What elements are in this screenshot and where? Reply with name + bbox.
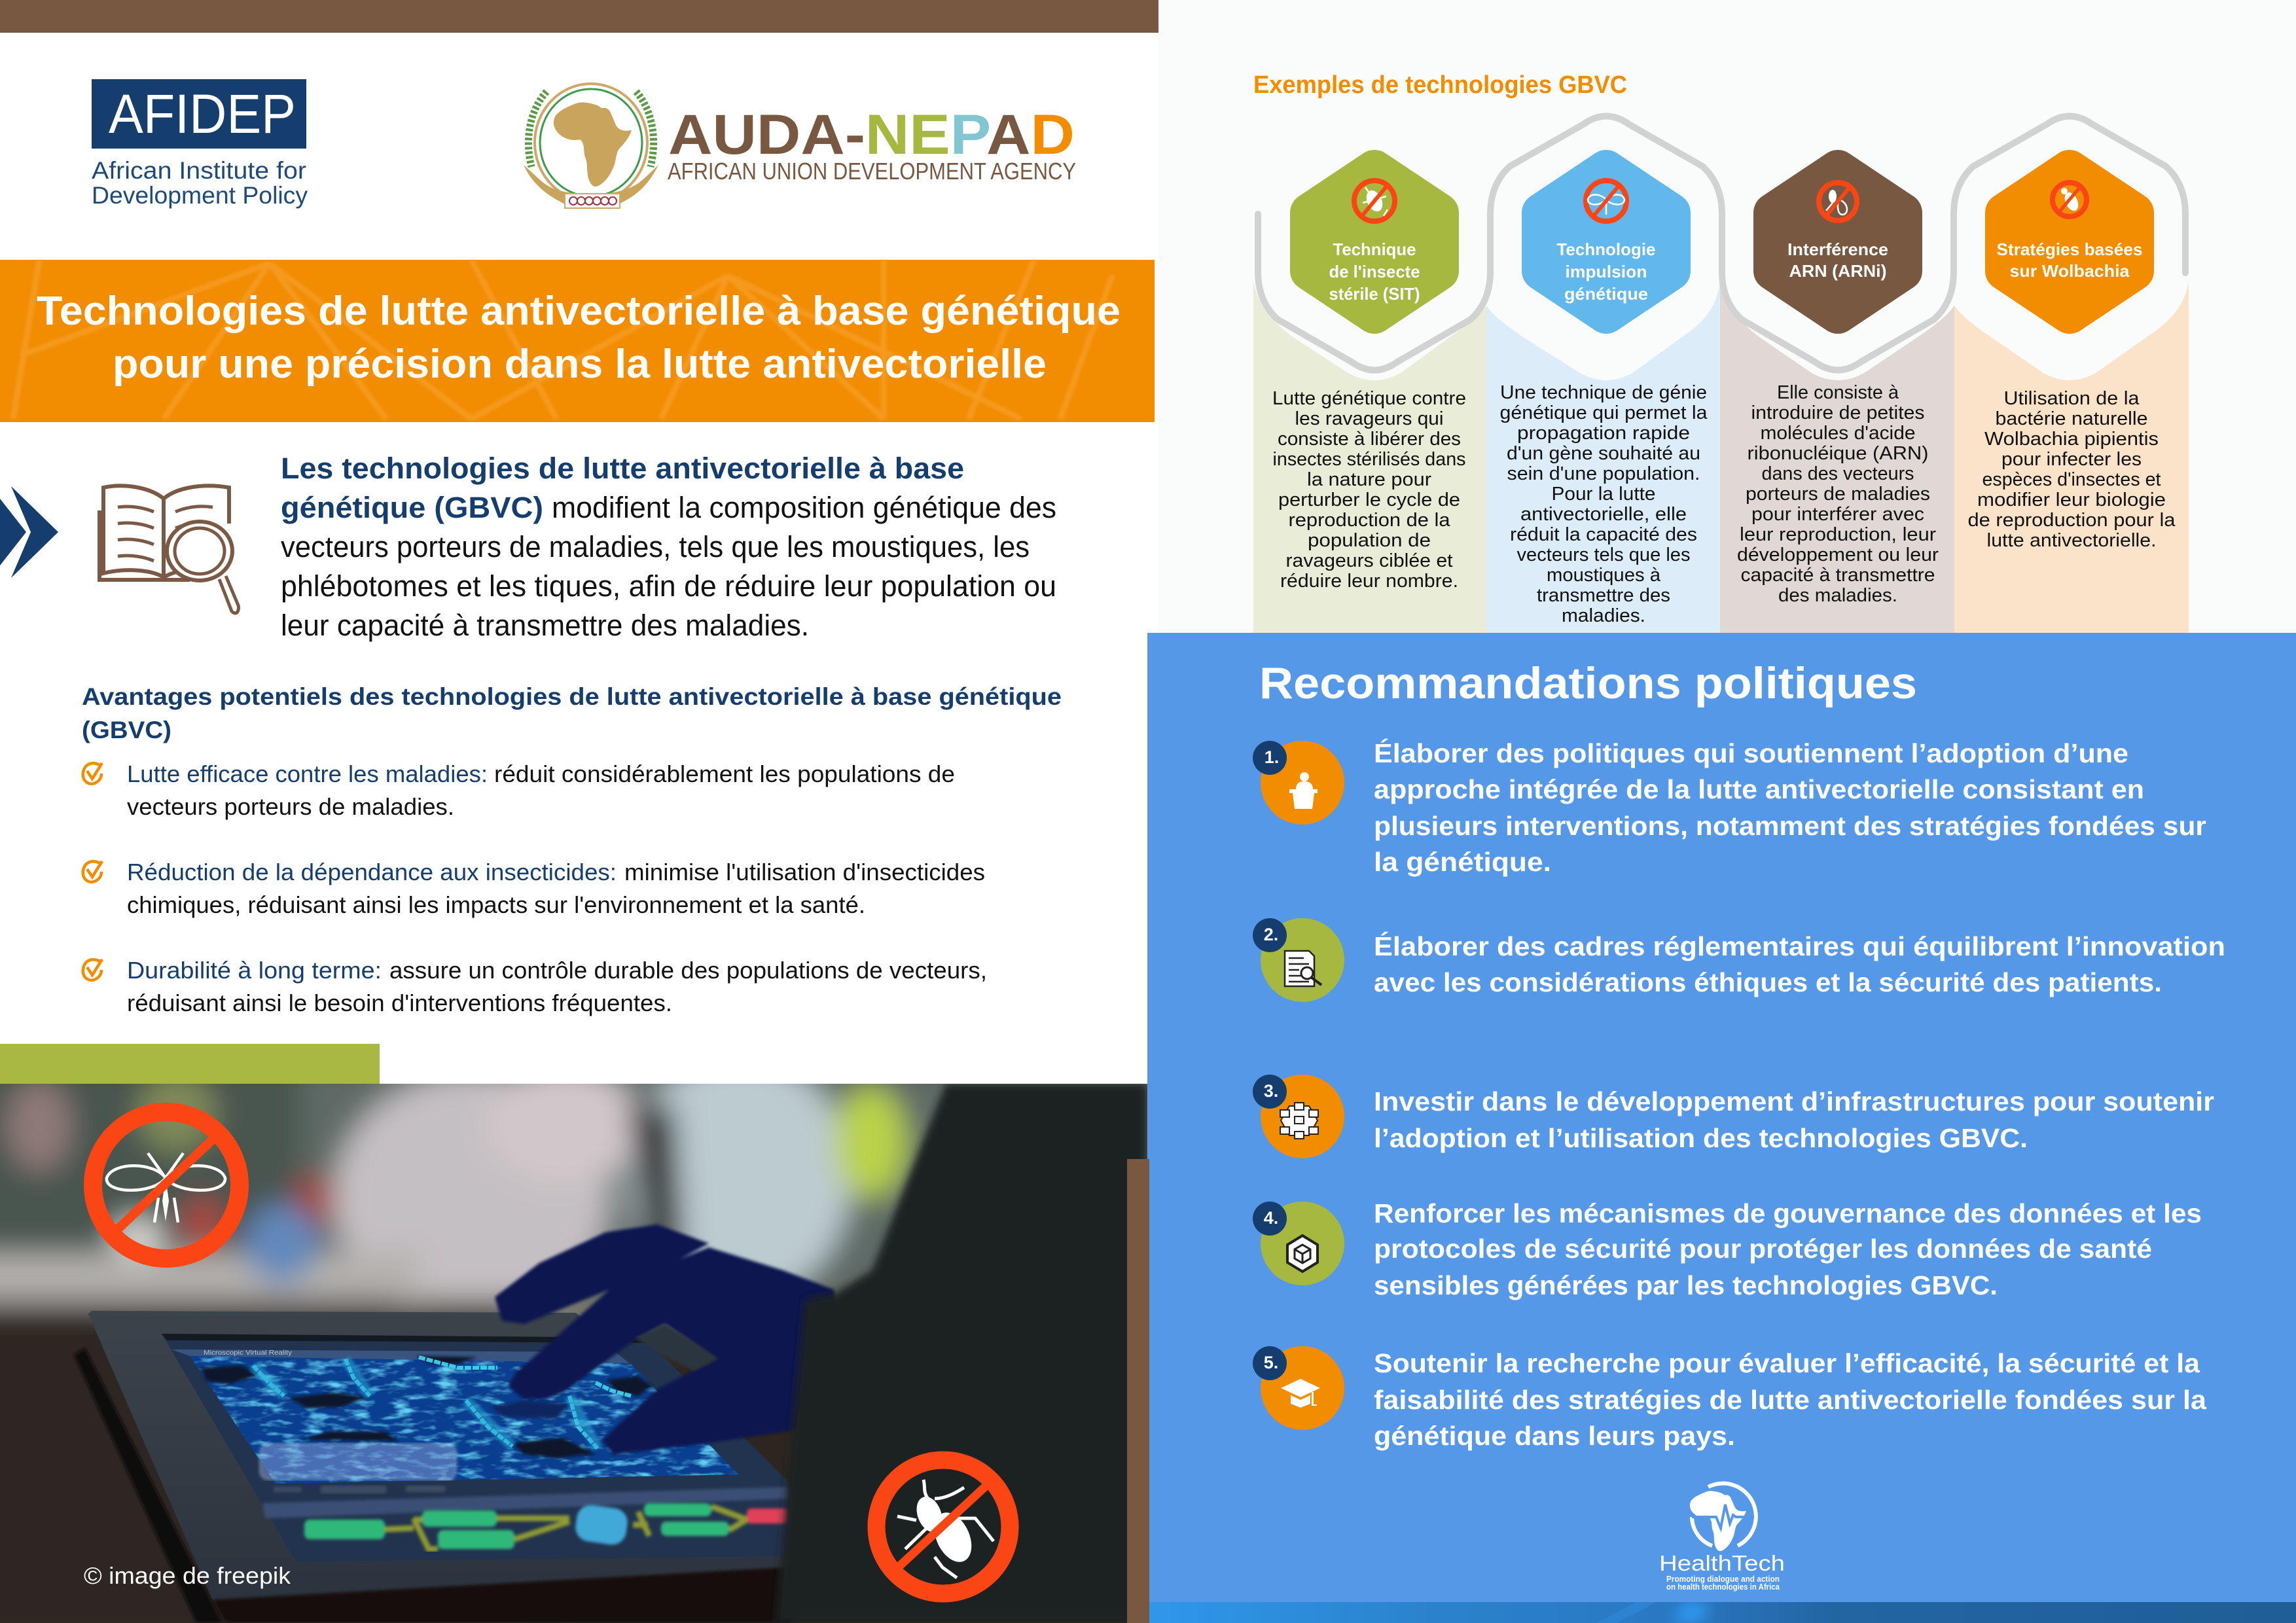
icon: African Union emblem (524, 84, 658, 208)
icon: check (83, 763, 102, 784)
logo: AUDA-NEPAD (524, 84, 1076, 208)
hexagon: RNAi: Interférence (1787, 240, 1888, 259)
text: SIT description: réduire leur nombre. (1280, 571, 1458, 592)
text: SIT description: reproduction de la (1288, 510, 1450, 531)
heading: avantages (82, 683, 1062, 743)
recommendation 2: avec les considérations éthiques et la sécurité des patients. (1374, 967, 2162, 997)
hexagon: Wolbachia: sur Wolbachia (2009, 261, 2130, 281)
recommendation 4: 4. (1264, 1208, 1278, 1228)
benefit 3: réduisant ainsi le besoin d'interventions fréquentes. (127, 990, 672, 1016)
text: gene drive description: Une technique de génie (1500, 382, 1707, 403)
hexagon: gene drive: génétique (1564, 284, 1648, 304)
hexagon: RNAi (1773, 169, 1903, 314)
recommendation 5 (1253, 1346, 2207, 1451)
text: SIT description: la nature pour (1307, 469, 1431, 490)
text: SIT description: consiste à libérer des (1278, 429, 1461, 450)
column background: SIT (1253, 279, 1486, 633)
icon: crossed mosquito (1586, 181, 1626, 221)
recommendation 2: Élaborer des cadres réglementaires qui équilibrent l’innovation (1374, 931, 2225, 961)
logo: HealthTech: Promoting dialogue and action (1666, 1575, 1780, 1584)
benefit 2: minimise l'utilisation d'insecticides (624, 859, 985, 885)
connecting grey ring line (1258, 116, 2185, 370)
text: Wolbachia description: de reproduction pour la (1967, 510, 2176, 531)
column background: gene drive (1486, 279, 1720, 633)
recommendation 1: 1. (1265, 747, 1279, 767)
intro paragraph (281, 452, 1056, 642)
benefit 3: assure un contrôle durable des populations de vecteurs, (389, 957, 987, 984)
figure foreground (776, 1084, 1147, 1623)
hexagon: SIT (1310, 169, 1439, 314)
logo: AFIDEP (92, 79, 308, 209)
hexagon: SIT: Technique (1333, 240, 1416, 259)
text: RNAi description: leur reproduction, leur (1740, 524, 1936, 545)
heading: avantages: (GBVC) (82, 717, 171, 743)
heading: avantages: Avantages potentiels des technologies de lutte antivectorielle à base génétique (82, 683, 1062, 710)
text: gene drive description: moustiques à (1547, 565, 1661, 586)
icon: check (83, 861, 102, 882)
text: RNAi description: porteurs de maladies (1746, 484, 1930, 505)
recommendation 1: plusieurs interventions, notamment des stratégies fondées sur (1374, 811, 2206, 841)
recommendation 3: Investir dans le développement d’infrastructures pour soutenir (1374, 1086, 2214, 1116)
intro paragraph: leur capacité à transmettre des maladies. (281, 609, 809, 642)
recommendation 3: l’adoption et l’utilisation des technologies GBVC. (1374, 1123, 2028, 1153)
text: Wolbachia description: pour infecter les (2001, 449, 2142, 470)
icon: book and magnifier (99, 486, 239, 613)
recommendation 1: Élaborer des politiques qui soutiennent l’adoption d’une (1374, 738, 2128, 768)
text: RNAi description: pour interférer avec (1751, 504, 1924, 525)
photo: gloved hand on tablet (0, 1054, 1204, 1623)
hexagon: gene drive: impulsion (1566, 262, 1647, 281)
benefit 3 (83, 957, 987, 1016)
intro paragraph: phlébotomes et les tiques, afin de réduire leur population ou (281, 569, 1056, 603)
icon: document and magnifier (1285, 951, 1321, 986)
text: Wolbachia description: espèces d'insectes et (1982, 469, 2161, 490)
column background: RNAi (1720, 279, 1954, 633)
image credit: © image de freepik (84, 1562, 291, 1589)
recommendation 2 (1253, 918, 2225, 1002)
icon: network of cubes (1280, 1103, 1318, 1139)
hexagon: Wolbachia: Stratégies basées (1996, 240, 2143, 259)
glass overlay (260, 1444, 456, 1479)
text: gene drive description: réduit la capacité des (1510, 524, 1697, 545)
text: gene drive description: génétique qui permet la (1500, 402, 1708, 423)
text: gene drive description: maladies. (1562, 605, 1645, 626)
icon: check (83, 959, 102, 980)
text: Wolbachia description (1967, 388, 2176, 551)
text: SIT description: les ravageurs qui (1295, 408, 1444, 429)
text: SIT description: ravageurs ciblée et (1285, 550, 1453, 571)
text: RNAi description: développement ou leur (1737, 544, 1939, 565)
text: SIT description: Lutte génétique contre (1272, 388, 1466, 409)
title text: pour une précision dans la lutte antivectorielle (113, 342, 1047, 387)
hexagon: gene drive: Technologie (1556, 240, 1656, 259)
text: gene drive description: d'un gène souhaité au (1507, 443, 1700, 464)
recommendation 3 (1253, 1075, 2214, 1158)
text: gene drive description: vecteurs tels que les (1517, 544, 1690, 565)
text: gene drive description (1500, 382, 1708, 626)
benefit 1: réduit considérablement les populations de (494, 760, 955, 787)
logo: AUDA-NEPAD: AUDA- NEPAD (668, 103, 1075, 166)
tablet bezel seen through the hand (635, 1324, 718, 1371)
text: SIT description: population de (1308, 530, 1431, 551)
footer gradient strip (1147, 1602, 2296, 1623)
recommendation 1: approche intégrée de la lutte antivectorielle consistant en (1374, 774, 2144, 804)
text: Wolbachia description: lutte antivectorielle. (1987, 530, 2156, 551)
text: SIT description (1272, 388, 1466, 592)
hexagon: SIT: stérile (SIT) (1329, 284, 1420, 304)
recommendation 4: protocoles de sécurité pour protéger les données de santé (1374, 1234, 2152, 1264)
heading: exemples: Exemples de technologies GBVC (1253, 71, 1627, 99)
title text (37, 289, 1121, 387)
hexagon: gene drive (1541, 169, 1671, 314)
recommendation 2: 2. (1264, 925, 1278, 944)
recommendation 3: 3. (1264, 1081, 1278, 1101)
icon: hexagon with cube (1287, 1236, 1318, 1272)
hexagon: SIT: de l'insecte (1329, 262, 1420, 281)
text: RNAi description: dans des vecteurs (1762, 463, 1914, 484)
hexagon: RNAi: ARN (ARNi) (1789, 261, 1886, 281)
text: Wolbachia description: bactérie naturelle (1995, 408, 2148, 429)
logo: AFIDEP: Development Policy (92, 182, 308, 209)
recommendation 4 (1253, 1198, 2202, 1300)
text: gene drive description: Pour la lutte (1551, 484, 1656, 505)
logo: AUDA-NEPAD: AFRICAN UNION DEVELOPMENT AGENCY (668, 158, 1076, 185)
recommendation 5: génétique dans leurs pays. (1374, 1421, 1735, 1451)
text: gene drive description: propagation rapide (1517, 423, 1690, 444)
benefit 1 (83, 760, 955, 820)
intro paragraph: Les technologies de lutte antivectorielle à base (281, 452, 964, 485)
hexagon: Wolbachia (1996, 169, 2143, 314)
logo: HealthTech (1659, 1484, 1785, 1592)
title text: Technologies de lutte antivectorielle à base génétique (37, 289, 1121, 334)
icon: crossed bug (876, 1460, 1010, 1594)
top brown bar (0, 0, 1158, 33)
UI strip (262, 1487, 789, 1518)
text: RNAi description: Elle consiste à (1777, 382, 1899, 403)
recommendation 5: Soutenir la recherche pour évaluer l’efficacité, la sécurité et la (1374, 1348, 2200, 1378)
benefit 1: vecteurs porteurs de maladies. (127, 793, 454, 820)
recommendation 5: 5. (1264, 1353, 1278, 1372)
tablet (74, 1311, 797, 1623)
recommendation 1 (1253, 738, 2206, 877)
tablet: Microscopic Virtual Reality (204, 1349, 292, 1357)
text: SIT description: insectes stérilisés dans (1272, 449, 1466, 470)
text: gene drive description: antivectorielle, elle (1520, 504, 1687, 525)
green accent bar (0, 1044, 380, 1084)
recommendation 5: faisabilité des stratégies de lutte antivectorielle fondées sur la (1374, 1385, 2207, 1415)
text: Wolbachia description: Wolbachia pipientis (1984, 429, 2159, 450)
icon: crossed bug (2053, 183, 2087, 217)
text: RNAi description: molécules d'acide (1761, 423, 1915, 444)
benefit 2: chimiques, réduisant ainsi les impacts sur l'environnement et la santé. (127, 891, 865, 918)
recommendation 1: la génétique. (1374, 847, 1551, 877)
icon: crossed fly (1819, 183, 1857, 221)
benefit 2 (83, 859, 985, 918)
benefit 1: Lutte efficace contre les maladies: (127, 760, 488, 787)
blue recommendations panel background (1147, 633, 2296, 1623)
glove (495, 1224, 834, 1455)
icon: double chevron (0, 486, 58, 578)
text: Wolbachia description: modifier leur biologie (1977, 490, 2166, 510)
heading: recommandations: Recommandations politiques (1259, 658, 1917, 708)
brown side strip (1127, 1159, 1149, 1623)
logo: AFIDEP: African Institute for (92, 157, 306, 184)
column background: Wolbachia (1954, 279, 2189, 633)
text: RNAi description: capacité à transmettre (1741, 565, 1935, 586)
title banner (0, 260, 1155, 422)
intro paragraph: génétique (GBVC) (281, 491, 543, 524)
text: gene drive description: sein d'une population. (1507, 463, 1700, 484)
text: RNAi description: des maladies. (1778, 585, 1897, 606)
text: Wolbachia description: Utilisation de la (2004, 388, 2140, 409)
icon: podium speaker (1289, 772, 1318, 809)
text: RNAi description: introduire de petites (1751, 402, 1924, 423)
text: RNAi description: ribonucléique (ARN) (1748, 443, 1928, 464)
text: gene drive description: transmettre des (1537, 585, 1670, 606)
icon: graduation cap (1281, 1379, 1320, 1408)
panel: examples of GBVC technologies (1253, 116, 2189, 633)
logo: HealthTech: on health technologies in Africa (1666, 1582, 1780, 1592)
intro paragraph: vecteurs porteurs de maladies, tels que les moustiques, les (281, 530, 1030, 563)
intro paragraph: modifient la composition génétique des (552, 491, 1056, 524)
logo: AFIDEP: AFIDEP (109, 83, 296, 145)
logo: HealthTech: HealthTech (1659, 1551, 1785, 1575)
recommendation 4: sensibles générées par les technologies GBVC. (1374, 1270, 1998, 1300)
benefit 2: Réduction de la dépendance aux insecticides: (127, 859, 617, 885)
icon: crossed tick (1354, 181, 1395, 221)
text: SIT description: perturber le cycle de (1278, 490, 1460, 510)
text: RNAi description (1737, 382, 1939, 606)
recommendation 4: Renforcer les mécanismes de gouvernance des données et les (1374, 1198, 2202, 1228)
icon: crossed mosquito (93, 1112, 240, 1258)
benefit 3: Durabilité à long terme: (127, 957, 382, 984)
